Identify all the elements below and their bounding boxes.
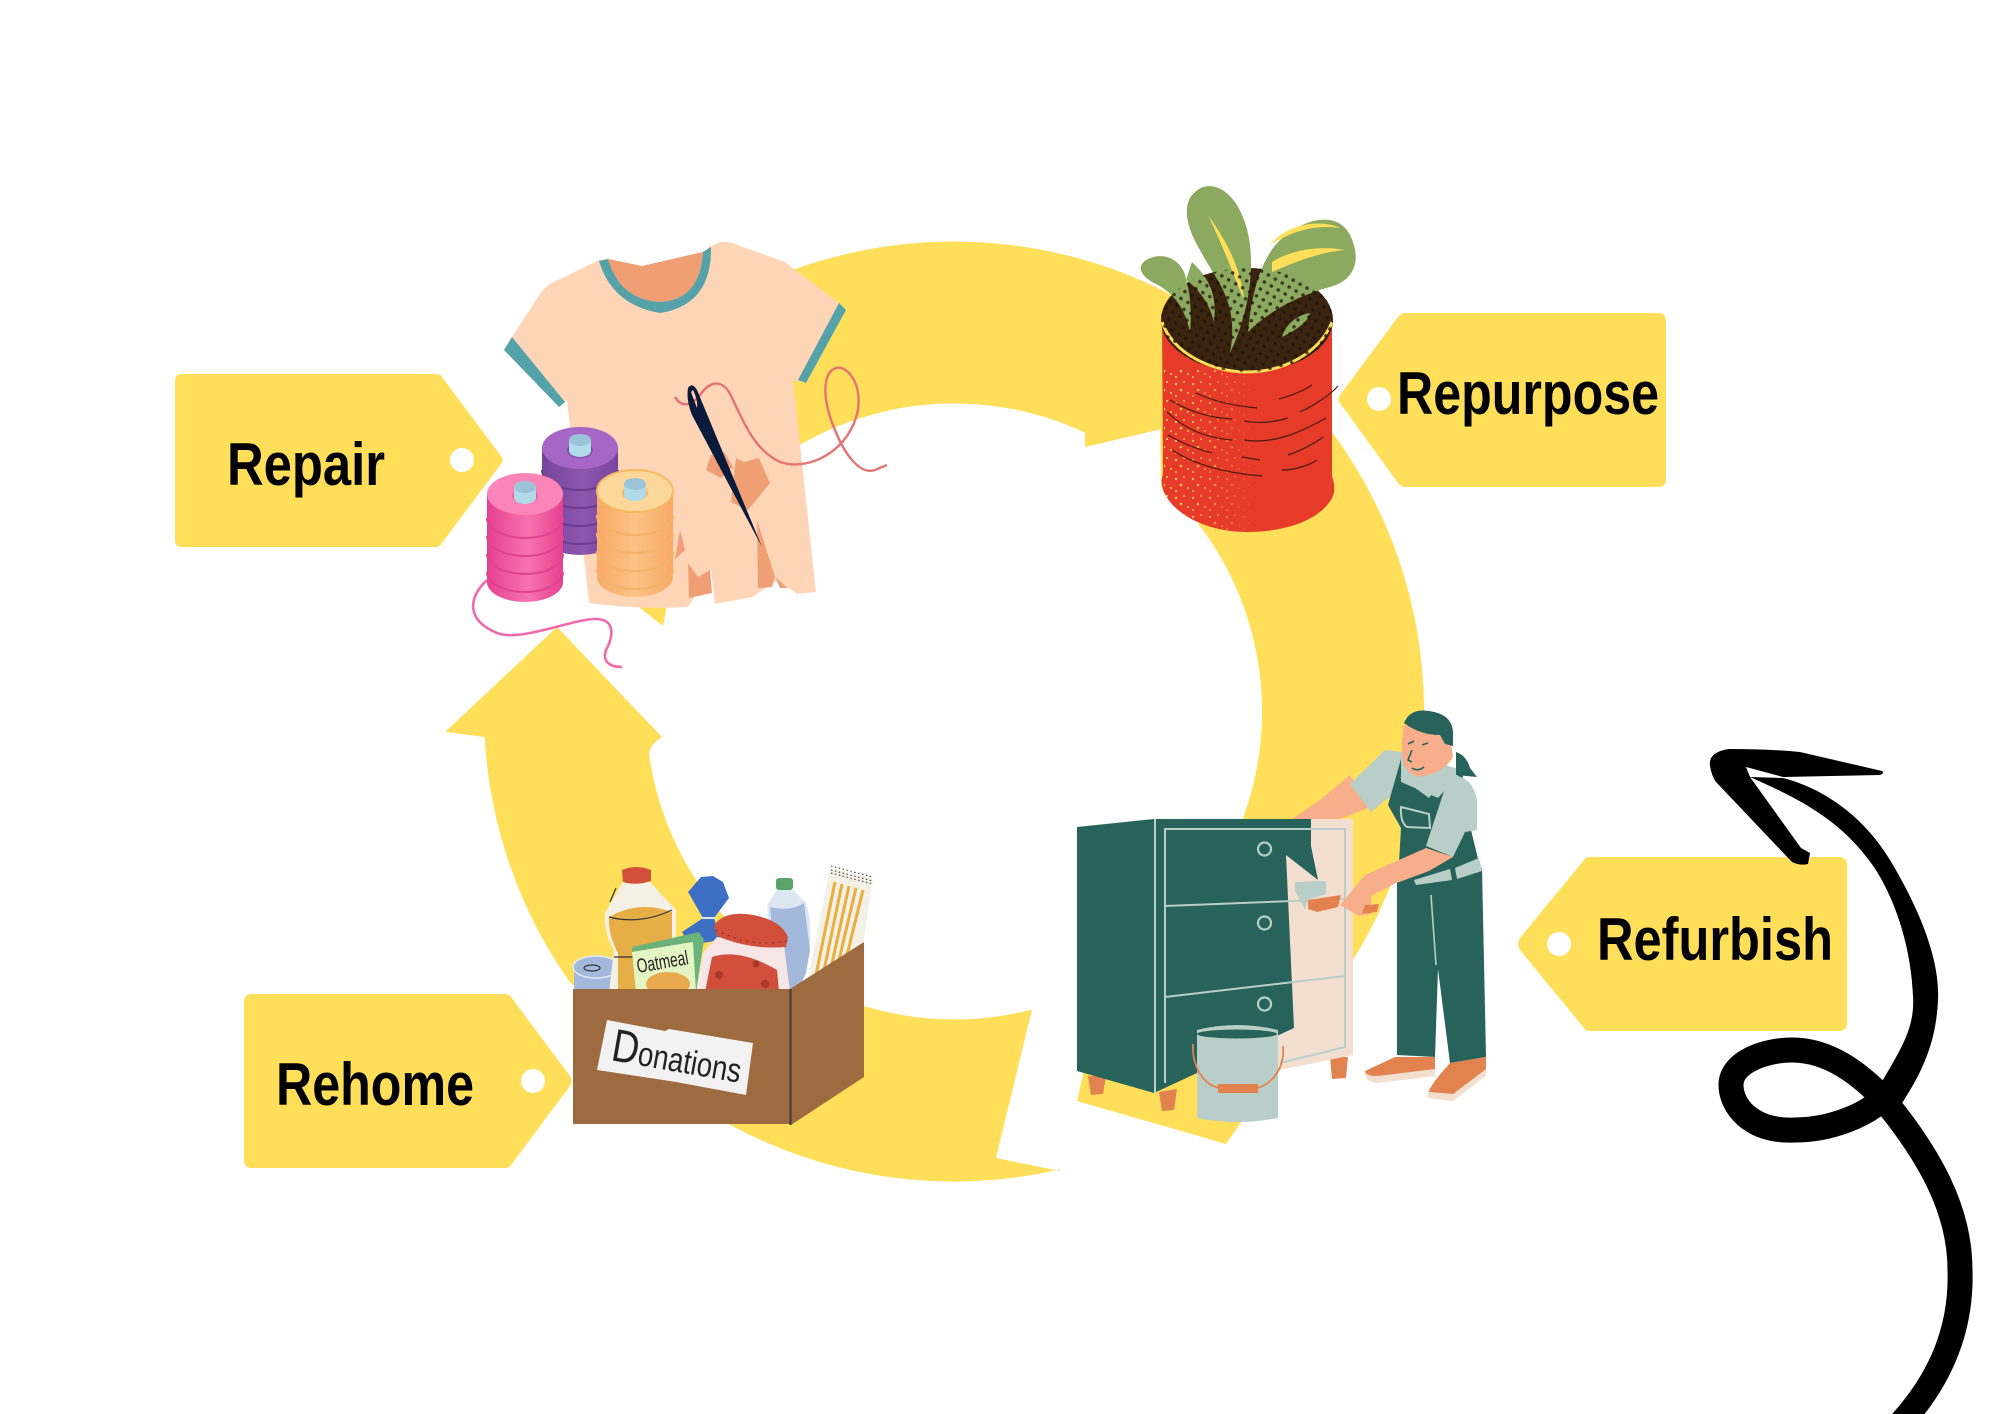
donations paper label [597,1019,753,1095]
painter right sleeve [1426,775,1477,857]
painter facial features [1408,741,1428,770]
cycle arrow: repurpose to refurbish [1077,434,1424,1144]
dresser side [1077,819,1154,1093]
center leaf highlight [1208,215,1244,300]
dresser frame lines [1155,819,1345,1093]
painter hair [1404,710,1453,746]
sprout leaf [1186,262,1215,322]
illustration: torn shirt with needle and thread [504,242,887,608]
cycle arrow: rehome to repair [445,627,801,1010]
cycle arrow: refurbish to rehome [700,993,1060,1182]
illustration: tin can planter [1141,186,1356,535]
painter collar [1400,764,1450,798]
tall center leaf [1187,186,1251,353]
label: Repair: Repair [227,431,385,498]
box corner edge [790,989,792,1125]
painter bib pocket [1401,807,1430,828]
shirt tears [675,452,788,598]
shirt neck opening [608,252,703,302]
shirt body [504,242,846,608]
paint brush handle [1308,895,1379,914]
box side [790,942,864,1125]
shirt sleeve trims [504,303,846,407]
painter ponytail [1456,752,1477,777]
oil bottle [605,867,676,992]
purple spool [542,427,618,555]
illustration: thread spools [473,427,673,667]
dresser painted front [1154,819,1318,1093]
painter bib [1388,759,1481,880]
halftone shading over soil [1161,268,1333,372]
blue bag [682,876,729,945]
small leaf left [1141,256,1191,333]
food tin [573,956,620,992]
can dents [1167,385,1338,476]
tag: Refurbish [1518,857,1847,1031]
tag: Repurpose [1338,313,1666,487]
needle [688,385,762,547]
can body [1162,320,1334,532]
label: Repurpose: Repurpose [1397,360,1659,427]
label: Refurbish: Refurbish [1597,906,1833,973]
water bottle [768,878,810,992]
spaghetti packet [806,866,873,990]
squiggle arrow [1710,749,1960,1414]
can rim [1162,322,1332,372]
orange spool [597,470,673,597]
pink spool [487,473,563,602]
dresser knobs [1258,842,1271,1010]
paint bucket [1193,1025,1283,1122]
shirt collar [599,247,711,313]
illustration: painter refurbishing dresser [1077,710,1486,1122]
tag: Rehome [244,994,572,1168]
thread through needle [675,368,887,471]
pink loose thread [473,580,622,667]
cycle arrow: repair to repurpose [790,241,1200,451]
box front [573,989,790,1124]
can speckle texture [1164,370,1250,530]
paint brush bristles [1295,881,1326,909]
label: Rehome: Rehome [276,1051,474,1118]
arrow head [1710,749,1883,865]
illustration: donation box [573,866,873,1125]
dresser legs [1088,1057,1348,1111]
oatmeal label: Oatmeal [635,947,690,978]
cycle arrow tail notch under shirt [630,600,668,626]
painter trouser crease [1431,895,1436,965]
arrow loop and lower stroke [1731,1050,1960,1414]
painter waist band [1414,858,1482,885]
right leaf highlight [1270,223,1345,272]
painter torso shirt [1350,750,1470,830]
painter legs and overalls [1397,868,1486,1063]
donations text: Donations [608,1019,746,1093]
painter right arm [1340,848,1453,916]
oatmeal carton [632,932,704,996]
soil [1161,268,1333,372]
jar of sauce [696,914,790,992]
painter shoes [1365,1064,1486,1101]
dresser unpainted front [1270,819,1353,1072]
large right leaf [1248,220,1356,332]
can yellow offset shadow [1159,320,1200,520]
arrow upper stroke [1750,777,1938,1112]
painter face [1402,725,1453,777]
buried leaf [1282,313,1310,337]
tag: Repair [175,374,502,547]
painter left arm [1292,775,1368,819]
